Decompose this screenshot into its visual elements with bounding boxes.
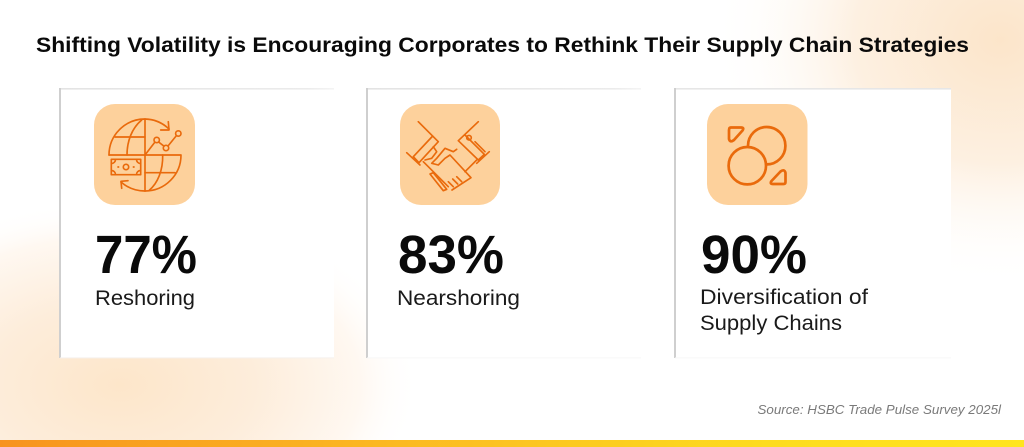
panel: reshoring <box>59 88 334 358</box>
stat: 90%: 90% <box>701 225 807 285</box>
label: nearshoring: Nearshoring <box>397 287 520 310</box>
label: reshoring: Reshoring <box>95 287 195 310</box>
label: diversification of supply chains <box>700 286 868 335</box>
label: diversification of supply chains: Diversification of <box>700 286 868 309</box>
icon: overlapping circles <box>707 104 808 205</box>
bottom gradient bar <box>0 440 1024 447</box>
panel: nearshoring <box>366 88 641 358</box>
icon: handshake <box>400 104 500 205</box>
source note: Source: HSBC Trade Pulse Survey 2025l <box>758 403 1002 417</box>
stat: 77%: 77% <box>95 225 197 285</box>
stat: 83%: 83% <box>398 225 504 285</box>
label: diversification of supply chains: Supply Chains <box>700 312 842 335</box>
title: Shifting Volatility is Encouraging Corporates to Rethink Their Supply Chain Strategies <box>36 33 969 57</box>
icon: globe with cash and chart <box>94 104 195 205</box>
panel: diversification <box>674 88 951 358</box>
